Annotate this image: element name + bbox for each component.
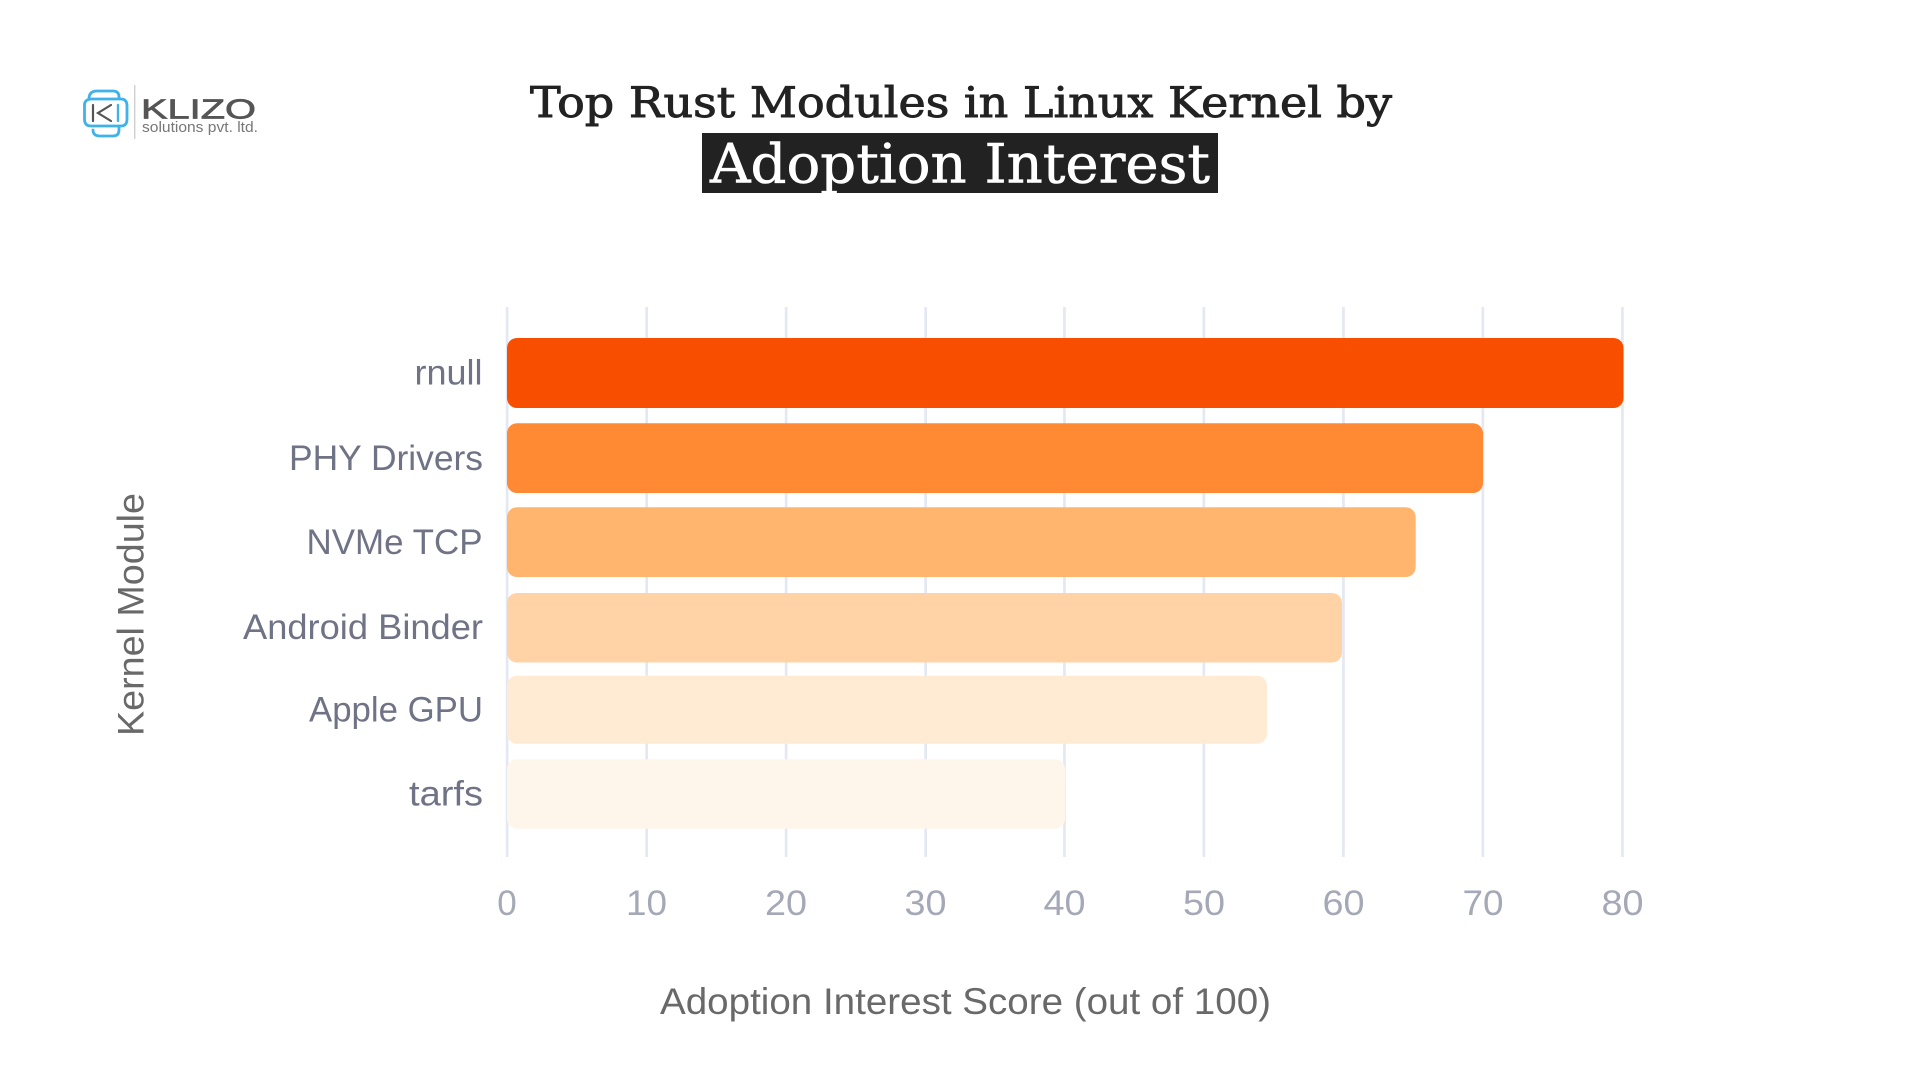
category labels: [243, 354, 483, 814]
logo divider: [134, 85, 135, 139]
logo tagline: solutions pvt. ltd.: [142, 120, 258, 136]
bar: NVMe TCP 65: [507, 507, 1416, 577]
x-axis title: Adoption Interest Score (out of 100): [660, 981, 1271, 1022]
x-axis tick labels: [497, 884, 1644, 923]
category labels: rnull: [414, 354, 482, 393]
bar: PHY Drivers 70: [507, 423, 1483, 493]
x-axis tick labels: 0: [497, 884, 517, 923]
x-axis tick labels: 40: [1044, 884, 1086, 923]
bar: Apple GPU 54.5: [507, 676, 1267, 744]
bar: tarfs 40: [507, 759, 1065, 829]
x-axis tick labels: 70: [1462, 884, 1504, 923]
bar chart: [110, 307, 1644, 1022]
x-axis tick labels: 10: [626, 884, 667, 923]
x-axis tick labels: 20: [765, 884, 807, 923]
x-axis tick labels: 50: [1183, 884, 1225, 923]
category labels: tarfs: [409, 775, 483, 814]
title line one: Top Rust Modules in Linux Kernel by: [530, 78, 1392, 127]
category labels: NVMe TCP: [306, 523, 482, 562]
title: [530, 78, 1392, 196]
logo: Klizo: [84, 85, 258, 139]
category labels: Apple GPU: [309, 691, 483, 730]
x-axis tick labels: 60: [1322, 884, 1364, 923]
x-axis tick labels: 80: [1602, 884, 1644, 923]
logo wordmark: KLIZO: [141, 94, 256, 124]
title highlight: Adoption Interest: Adoption Interest: [709, 132, 1210, 196]
category labels: PHY Drivers: [289, 439, 483, 478]
y-axis title: Kernel Module: [110, 493, 152, 736]
icon: Klizo mark: [84, 91, 127, 136]
bar: rnull 80: [507, 338, 1624, 408]
bar: Android Binder 60: [507, 593, 1342, 662]
bars: [507, 338, 1624, 829]
grid lines: [506, 307, 1624, 857]
x-axis tick labels: 30: [904, 884, 946, 923]
category labels: Android Binder: [243, 608, 483, 647]
